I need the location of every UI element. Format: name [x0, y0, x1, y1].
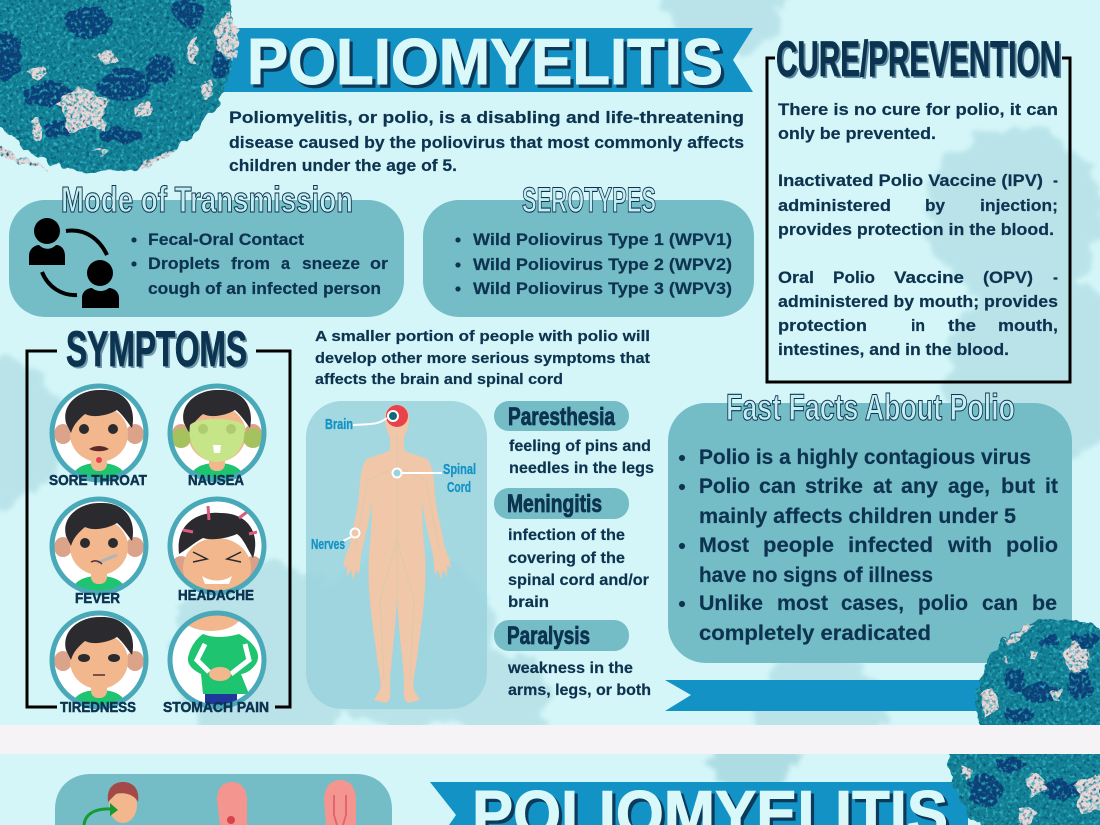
second title banner [430, 782, 968, 825]
panel: serotypes [423, 181, 754, 317]
icon: spinal cord marker [392, 468, 442, 478]
block: meningitis: infection of the [508, 527, 625, 544]
block: paresthesia: needles in the legs [509, 460, 654, 477]
list: fast facts: most [777, 592, 828, 615]
list: fast facts: people [763, 534, 834, 557]
virus illustration: bottom right [974, 618, 1100, 725]
block: meningitis: covering of the [508, 550, 625, 567]
panel: symptoms [27, 321, 290, 716]
block: meningitis: Meningitis [507, 490, 602, 518]
block: paralysis [494, 620, 651, 699]
panel: second page symptoms [55, 774, 392, 825]
symptom: tiredness: TIREDNESS [60, 699, 136, 716]
list: serotypes: Wild Poliovirus Type 1 (WPV1) [473, 230, 732, 249]
block: meningitis: brain [508, 594, 549, 611]
faded virus on second page [704, 754, 804, 782]
text: cure and vaccines: in [911, 316, 925, 335]
title banner [220, 28, 753, 92]
list: transmission routes: from [231, 254, 270, 273]
symptom: nausea [170, 386, 264, 489]
list: fast facts: with [947, 534, 992, 557]
text: cure and vaccines: - [1053, 268, 1058, 287]
icon: throat [217, 782, 247, 825]
text: cure and vaccines: Oral [778, 268, 814, 287]
intro text: disease caused by the poliovirus that most commonly affects [229, 133, 744, 152]
list: transmission routes [132, 230, 388, 298]
intro text: children under the age of 5. [229, 156, 457, 175]
heading: serotypes: SEROTYPES [522, 181, 656, 220]
panel: mode of transmission [9, 179, 404, 317]
text: cure and vaccines: only be prevented. [778, 124, 936, 143]
symptom: sore throat: SORE THROAT [49, 472, 147, 489]
icon: man breathing [84, 782, 138, 825]
virus illustration: second page [946, 754, 1100, 825]
list: fast facts: polio [918, 592, 968, 615]
text: cure and vaccines: (OPV) [983, 268, 1033, 287]
label: spinal cord: Cord [447, 479, 471, 496]
page break strip [0, 725, 1100, 754]
label: spinal cord: Spinal [443, 461, 476, 478]
block: meningitis: spinal cord and/or [508, 572, 649, 589]
block: paralysis: Paralysis [507, 622, 590, 650]
icon: brain marker [353, 405, 408, 427]
list: fast facts: Polio [699, 475, 750, 498]
block: paresthesia [494, 401, 654, 477]
symptom: stomach pain [163, 610, 268, 712]
list: transmission routes: Droplets [148, 254, 220, 273]
list: fast facts: completely eradicated [699, 622, 931, 645]
symptom: fever: FEVER [75, 590, 120, 607]
list: fast facts: strike [805, 475, 863, 498]
text: serious symptoms intro [315, 328, 650, 388]
intro text: Poliomyelitis, or polio, is a disabling and life-threatening [229, 108, 744, 127]
icon: people transmitting [29, 218, 119, 308]
list: fast facts [679, 446, 1058, 645]
panel: body diagram [306, 401, 487, 709]
text: cure and vaccines: the [948, 316, 976, 335]
ribbon [665, 680, 985, 711]
panel: cure and prevention [767, 31, 1070, 382]
list: fast facts: Unlike [699, 592, 763, 615]
label: spinal cord [443, 461, 476, 496]
heading: symptoms: SYMPTOMS [66, 321, 247, 377]
label: brain: Brain [325, 416, 353, 433]
text: cure and vaccines: injection; [980, 196, 1058, 215]
list: fast facts: infected [848, 534, 933, 557]
text: cure and vaccines: protection [778, 316, 867, 335]
block: meningitis [494, 488, 649, 611]
symptom: tiredness [52, 613, 146, 716]
text: serious symptoms intro: A smaller portion of people with polio will [315, 328, 650, 345]
block: paresthesia: Paresthesia [508, 403, 616, 431]
heading: symptoms [66, 321, 249, 379]
list: fast facts: Polio is a highly contagious virus [699, 446, 1031, 469]
text: cure and vaccines: Inactivated Polio Vaccine (IPV) [778, 171, 1043, 190]
symptom: stomach pain: STOMACH PAIN [163, 699, 269, 716]
list: serotypes [456, 230, 732, 298]
list: fast facts: mainly affects children under 5 [699, 505, 1016, 528]
list: fast facts: can [759, 475, 796, 498]
block: paralysis: weakness in the [507, 660, 633, 677]
list: fast facts: age, [948, 475, 990, 498]
symptom: headache: HEADACHE [178, 587, 254, 604]
title: POLIOMYELITIS [247, 25, 723, 98]
text: cure and vaccines: mouth, [998, 316, 1058, 335]
text: cure and vaccines [778, 100, 1058, 359]
virus illustration: top left [0, 0, 238, 172]
block: paresthesia: feeling of pins and [509, 438, 651, 455]
list: fast facts: but [1001, 475, 1035, 498]
list: serotypes: Wild Poliovirus Type 2 (WPV2) [473, 255, 732, 274]
panel: fast facts [668, 387, 1072, 663]
list: fast facts: polio [1006, 534, 1058, 557]
text: cure and vaccines: administered by mouth; provides [778, 292, 1058, 311]
heading: symptoms: SYMPTOMS [68, 323, 249, 379]
list: fast facts: can [982, 592, 1018, 615]
block: paralysis: arms, legs, or both [508, 682, 651, 699]
text: cure and vaccines: Polio [833, 268, 875, 287]
label: nerves: Nerves [311, 536, 345, 553]
list: fast facts: at [873, 475, 892, 498]
text: cure and vaccines: by [925, 196, 946, 215]
heading: mode of transmission: Mode of Transmission [61, 179, 353, 220]
list: transmission routes: Fecal-Oral Contact [148, 230, 304, 249]
text: cure and vaccines: Vaccine [894, 268, 964, 287]
list: transmission routes: or [370, 254, 388, 273]
symptom: sore throat [49, 386, 147, 489]
text: serious symptoms intro: affects the brain and spinal cord [315, 371, 563, 388]
text: serious symptoms intro: develop other more serious symptoms that [315, 350, 650, 367]
list: transmission routes: sneeze [302, 254, 360, 273]
list: fast facts: cases, [841, 592, 904, 615]
text: cure and vaccines: - [1053, 171, 1058, 190]
list: fast facts: it [1045, 475, 1058, 498]
text: cure and vaccines: intestines, and in the blood. [778, 340, 1009, 359]
list: transmission routes: a [281, 254, 291, 273]
symptom: fever [52, 499, 146, 607]
intro text [229, 108, 744, 175]
text: cure and vaccines: administered [778, 196, 891, 215]
symptom: headache [170, 499, 264, 604]
list: transmission routes: cough of an infected person [148, 279, 381, 298]
text: cure and vaccines: There is no cure for polio, it can [778, 100, 1058, 119]
symptom: nausea: NAUSEA [188, 472, 244, 489]
list: serotypes: Wild Poliovirus Type 3 (WPV3) [473, 279, 732, 298]
icon: airway [324, 780, 356, 825]
list: fast facts: Most [699, 534, 749, 557]
list: fast facts: be [1032, 592, 1057, 615]
list: fast facts: have no signs of illness [699, 564, 933, 587]
illustration: human body [343, 405, 451, 703]
list: fast facts: any [901, 475, 938, 498]
text: cure and vaccines: provides protection in the blood. [778, 220, 1054, 239]
icon: nerves marker [343, 528, 360, 541]
title: POLIOMYELITIS [250, 28, 726, 101]
